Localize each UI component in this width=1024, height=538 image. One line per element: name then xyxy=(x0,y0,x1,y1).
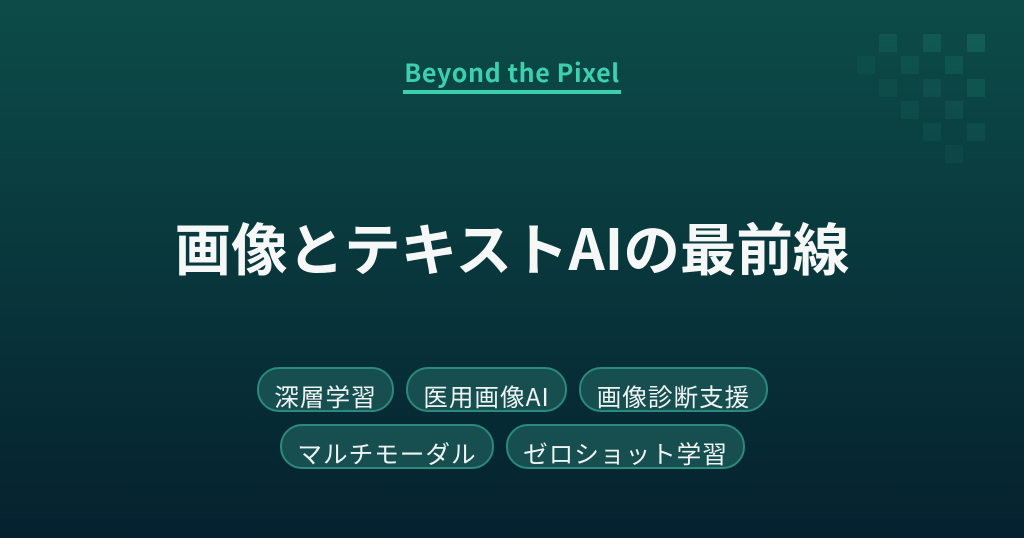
title: 画像とテキストAIの最前線 xyxy=(175,205,849,287)
tag: ゼロショット学習: ゼロショット学習 xyxy=(523,435,728,471)
tag: 医用画像AI xyxy=(406,367,567,412)
tag: 医用画像AI: 医用画像AI xyxy=(423,378,550,414)
tag: 画像診断支援: 画像診断支援 xyxy=(597,378,750,414)
tag: 深層学習: 深層学習 xyxy=(274,378,377,414)
tag group xyxy=(257,367,768,471)
eyebrow underline xyxy=(403,90,621,94)
eyebrow heading: Beyond the Pixel xyxy=(403,54,621,94)
eyebrow text: Beyond the Pixel xyxy=(404,54,620,90)
tag: ゼロショット学習 xyxy=(506,424,745,469)
tag: 深層学習 xyxy=(257,367,394,412)
tag: 画像診断支援 xyxy=(579,367,768,412)
tag: マルチモーダル xyxy=(280,424,494,469)
tag: マルチモーダル: マルチモーダル xyxy=(297,435,477,471)
